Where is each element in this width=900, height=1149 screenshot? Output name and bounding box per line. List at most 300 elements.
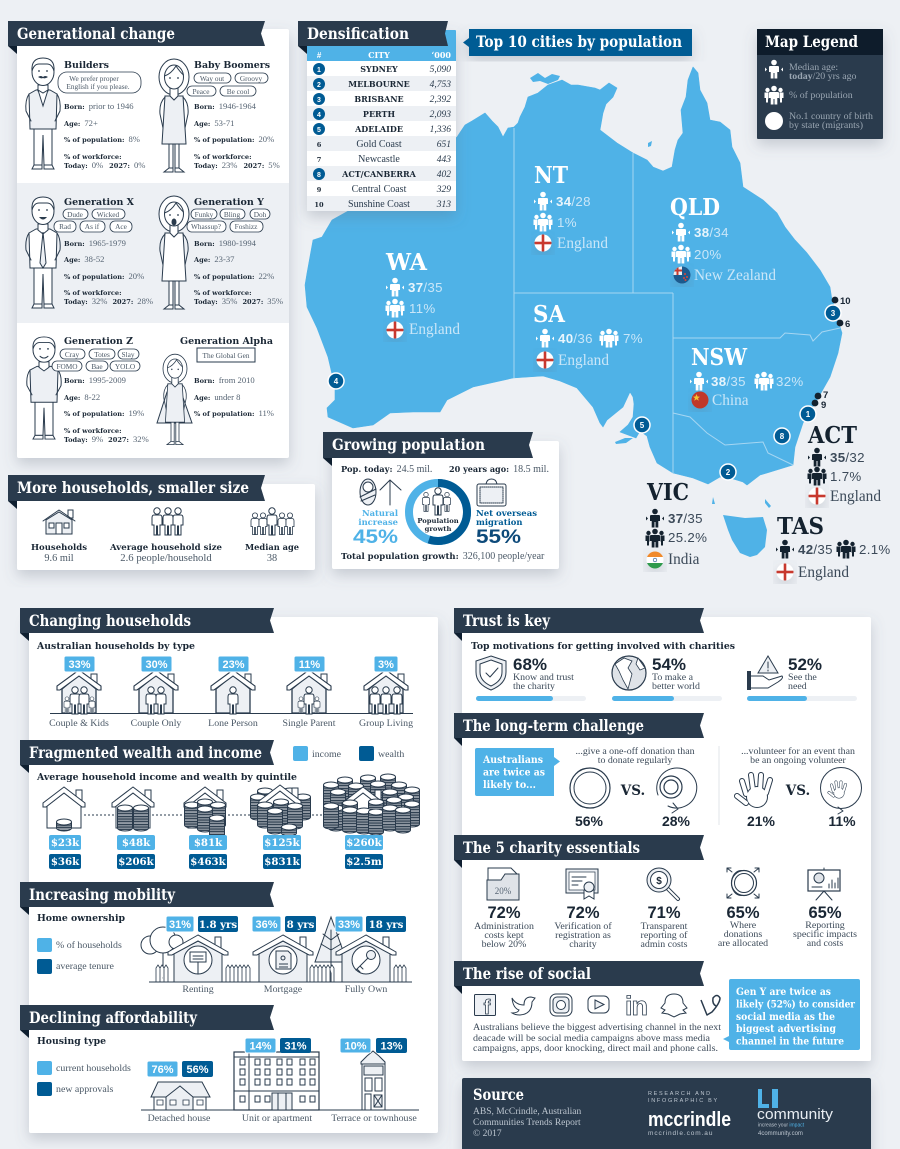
text: generation z: Slay: [122, 350, 135, 359]
text: generation y: [187, 197, 283, 308]
essential: where donations allocated: 65%: [726, 904, 760, 922]
household: single parent: 11%: [299, 659, 320, 671]
table rows: 7: [317, 156, 322, 164]
city marker: 1 Sydney: 1: [806, 410, 811, 419]
city marker: 10 Sunshine Coast: [832, 296, 851, 307]
state label: NSW: 32%: [776, 374, 804, 389]
callout: australians twice as likely: likely to...: [483, 779, 536, 791]
text: generation alpha: The Global Gen: [202, 351, 250, 360]
essential: verification: registration as: [555, 930, 611, 941]
subheading: top motivations: Top motivations for getting involved with charities: [471, 641, 735, 652]
text: generation x: % of workforce:: [64, 289, 122, 297]
stat: households: Households: [31, 542, 87, 552]
heading: declining affordability: Declining affordability: [29, 1008, 198, 1027]
figure: generation x: [26, 197, 60, 308]
house: fully own: [335, 916, 406, 995]
motivation: better world: [612, 655, 722, 701]
text: generation y: Generation Y: [194, 197, 264, 208]
comparison: donations: 56%: [575, 813, 604, 829]
state label: TAS: TAS: [777, 513, 824, 540]
icon: house: [43, 510, 75, 534]
heading: the 5 charity essentials: [454, 835, 704, 868]
heading: more households: [8, 475, 265, 509]
text: generation x: Today: 32% 2027: 28%: [64, 291, 153, 308]
table rows: 6: [317, 141, 322, 149]
state label: SA: 40/36: [558, 331, 593, 346]
state label: ACT: [807, 422, 881, 505]
text: social media paragraph: deacade will be social media campaigns above mass media: [473, 1033, 711, 1044]
text: builders: English if you please.: [66, 82, 130, 91]
logo: mccrindle: mccrindle: [648, 1109, 731, 1131]
quintile 1: $36k: [51, 856, 80, 868]
city marker: 8 Canberra: 8: [780, 432, 785, 441]
essential: reporting impacts: 65%: [808, 904, 842, 922]
text: generation alpha: Born: from 2010: [194, 370, 255, 387]
text: builders: Born: prior to 1946: [64, 96, 134, 113]
legend: income and wealth: income: [312, 749, 342, 760]
figure: generation alpha: [157, 354, 192, 445]
state label: SA: 7%: [623, 331, 643, 346]
building: terrace: 10%: [344, 1040, 367, 1052]
text: baby boomers: % of workforce:: [194, 153, 252, 161]
text: generation z: Generation Z: [64, 336, 133, 347]
comparison: volunteering: VS.: [785, 783, 810, 799]
building: terrace: [331, 1038, 417, 1124]
text: generation y: Today: 35% 2027: 35%: [194, 291, 283, 308]
table rows: 2,093: [430, 110, 451, 120]
essential: where donations allocated: Where: [730, 920, 757, 931]
table rows: [313, 63, 451, 210]
city marker: 8 Canberra: [774, 428, 790, 444]
table rows: PERTH: [363, 109, 396, 119]
text: builders: % of workforce:: [64, 153, 122, 161]
household: couple and kids: [49, 656, 109, 729]
callout: top 10 cities by population: Top 10 cities by population: [476, 32, 682, 51]
quintile 5: [324, 774, 420, 869]
donut chart: population growth: Population: [417, 517, 459, 525]
figure: generation y: [159, 196, 189, 309]
text: generation x: [54, 197, 153, 308]
state label: SA: [533, 301, 643, 369]
heading: generational change: [8, 21, 265, 54]
quintile 2: $48k: [122, 837, 151, 849]
stat: median age: 38: [267, 553, 277, 564]
text: generation x: Age: 38-52: [63, 249, 104, 266]
text: baby boomers: [187, 60, 280, 172]
state label: WA: WA: [385, 249, 428, 276]
icon: vine: [701, 996, 720, 1015]
text: generation z: Today: 9% 2027: 32%: [64, 429, 149, 446]
natural increase stat: Natural: [362, 508, 398, 518]
logo: 4community: community: [757, 1106, 834, 1123]
table rows: 2: [317, 82, 321, 89]
logo: mccrindle: mccrindle.com.au: [648, 1130, 713, 1137]
essential: transparent reporting: reporting of: [641, 930, 688, 941]
motivation: better world: To make a: [652, 672, 694, 683]
comparison: donations: 28%: [662, 813, 691, 829]
motivation: see the need: [747, 655, 857, 701]
legend: income and wealth: [293, 746, 404, 761]
icon: suitcase: [477, 479, 506, 506]
city marker: 3 Brisbane: 3: [831, 309, 836, 318]
state label: VIC: 25.2%: [668, 530, 707, 545]
table rows: 402: [437, 170, 451, 180]
flag: New Zealand: [673, 266, 690, 284]
housing type legend: Housing type: [37, 1036, 106, 1047]
icon: snapchat: [661, 994, 687, 1017]
house: fully own: 33%: [338, 919, 360, 931]
social icons: [474, 991, 720, 1021]
city marker: 9 Central Coast: [812, 400, 826, 411]
text: generation y: Bling: [224, 210, 240, 219]
household: couple only: 30%: [145, 659, 168, 671]
table rows: 2,392: [430, 95, 451, 105]
state label: NT: 1%: [557, 215, 577, 230]
motivation: know and trust: 68%: [513, 655, 547, 674]
text: generation y: Age: 23-37: [193, 249, 235, 266]
subheading: quintile: Average household income and wealth by quintile: [36, 772, 297, 783]
motivation: see the need: See the: [788, 672, 817, 683]
city marker: 2 Melbourne: 2: [726, 468, 731, 477]
city marker: 6 Gold Coast: 6: [845, 319, 850, 330]
house: renting: 31%: [169, 919, 191, 931]
table rows: SYDNEY: [360, 64, 398, 74]
heading: trust is key: Trust is key: [463, 611, 551, 630]
figure: builders: [26, 58, 60, 169]
text: source: [473, 1085, 581, 1139]
logo: mccrindle: RESEARCH AND: [648, 1091, 712, 1097]
state label: QLD: 38/34: [694, 225, 729, 240]
legend: median age: today/20 yrs ago: [789, 71, 857, 82]
panel: more households, smaller size: [8, 475, 315, 570]
city marker: 3 Brisbane: [825, 305, 841, 321]
city marker: 4 Perth: 4: [334, 377, 339, 386]
text: generation x: Rad: [59, 222, 71, 231]
table rows: 1: [317, 67, 321, 74]
essential: reporting impacts: and costs: [807, 938, 843, 949]
table header: #: [317, 51, 322, 60]
figure: baby boomers: [159, 59, 189, 172]
net overseas migration stat: [476, 508, 537, 548]
text: builders: [58, 60, 145, 172]
table header: [317, 50, 451, 60]
mainland: [305, 67, 842, 485]
motivation: better world: 54%: [652, 655, 686, 674]
household: single parent: Single Parent: [283, 718, 336, 729]
comparison: donations: ...give a one-off donation than: [575, 746, 695, 757]
house: detached: 76%: [151, 1064, 174, 1076]
home ownership legend: Home ownership: [37, 913, 125, 924]
motivation: see the need: need: [788, 681, 807, 692]
natural increase stat: [353, 508, 398, 548]
text: baby boomers: % of population: 20%: [194, 129, 274, 146]
donut chart: population growth: growth: [425, 525, 451, 533]
essential: verification: Verification of: [554, 921, 612, 932]
essential: reporting impacts: [793, 868, 857, 949]
text: source: Communities Trends Report: [473, 1118, 581, 1128]
text: baby boomers: Peace: [192, 87, 210, 96]
state label: NSW: [690, 344, 804, 409]
callout: gen y: social media as the: [736, 1011, 835, 1023]
state label: ACT: ACT: [807, 422, 857, 449]
stat: average household size: 2.6 people/household: [120, 552, 212, 564]
city marker: 5 Adelaide: 5: [640, 421, 645, 430]
text: generation y: Funky: [195, 210, 214, 219]
stat: average household size: Average household size: [109, 542, 222, 552]
text: source: © 2017: [473, 1128, 502, 1139]
city marker: 7 Newcastle: [815, 390, 828, 401]
heading: densification: [298, 21, 448, 54]
table rows: 443: [437, 155, 451, 165]
text: generation x: Wicked: [97, 210, 120, 219]
building: apartment: 14%: [249, 1040, 272, 1052]
quintile 1: $23k: [51, 837, 80, 849]
text: generation z: YOLO: [115, 362, 135, 371]
state label: WA: [385, 249, 460, 339]
state label: QLD: New Zealand: [694, 267, 776, 284]
natural increase stat: 45%: [353, 527, 398, 548]
essential: where donations allocated: donations: [724, 929, 762, 940]
ground line: [50, 712, 413, 714]
state label: SA: SA: [533, 301, 566, 328]
quintile 2: $206k: [118, 856, 155, 868]
text: social media paragraph: Australians believe the biggest advertising channel in the next: [473, 1022, 721, 1033]
state label: NSW: 38/35: [711, 374, 746, 389]
text: builders: We prefer proper: [69, 74, 119, 83]
quintile 4: $125k: [264, 837, 301, 849]
text: social media paragraph: campaigns, apps, door knocking, direct mail and phone calls.: [473, 1043, 718, 1054]
essential: reporting impacts: specific impacts: [793, 929, 857, 940]
essential: reporting impacts: Reporting: [805, 920, 845, 931]
state borders: [514, 128, 840, 473]
table rows: 313: [436, 200, 451, 210]
panel: growing population: [323, 432, 559, 569]
text: baby boomers: Age: 53-71: [193, 113, 234, 130]
heading: fragmented wealth and income: [20, 740, 274, 773]
table rows: 10: [314, 201, 324, 209]
household: lone person: [208, 656, 258, 729]
essential: verification: 72%: [566, 904, 600, 922]
text: baby boomers: Be cool: [227, 87, 249, 96]
stat: median age: [245, 542, 299, 564]
text: generation z: [52, 336, 149, 446]
building: apartment: [234, 1038, 319, 1124]
callout: gen y: Gen Y are twice as: [736, 986, 831, 998]
text: generation y: Whassup?: [191, 222, 221, 231]
city marker: 6 Gold Coast: [837, 319, 850, 330]
panel: right lower card: [454, 608, 871, 1061]
state label: ACT: 35/32: [830, 450, 865, 465]
motivation: better world: better world: [652, 681, 700, 692]
state label: VIC: 37/35: [668, 511, 703, 526]
text: generation x: As if: [85, 222, 100, 231]
table rows: MELBOURNE: [348, 79, 410, 89]
panel: source: [462, 1078, 871, 1149]
ground line: [149, 981, 412, 983]
state label: TAS: 42/35: [798, 542, 833, 557]
essential: verification: [554, 869, 612, 950]
essential: administration costs: Administration: [474, 921, 534, 932]
heading: changing households: Changing households: [29, 611, 191, 630]
essential: transparent reporting: 71%: [647, 904, 681, 922]
total growth: Total population growth: 326,100 people/year: [341, 546, 545, 563]
logo: 4community: 4community.com: [758, 1131, 803, 1137]
heading: changing households: [20, 608, 274, 641]
callout: australians twice as likely: [475, 748, 560, 796]
essential: administration costs: costs kept: [484, 930, 524, 941]
text: generation z: Born: 1995-2009: [64, 370, 126, 387]
population today and 20 years ago: Pop. today: 24.5 mil.: [341, 459, 432, 476]
callout: gen y: biggest advertising: [736, 1023, 836, 1035]
text: generation y: % of population: 22%: [194, 266, 274, 283]
population today and 20 years ago: [341, 459, 549, 476]
table rows: 4: [317, 112, 321, 119]
state label: SA: England: [558, 352, 609, 369]
state label: ACT: 1.7%: [830, 469, 862, 484]
heading: fragmented wealth and income: Fragmented wealth and income: [29, 743, 262, 762]
house: mortgage: 36%: [255, 919, 278, 931]
text: generation x: Generation X: [64, 197, 135, 208]
subheading: households by type: Australian households by type: [36, 641, 195, 652]
home ownership legend: [37, 913, 125, 974]
callout: gen y: likely (52%) to consider: [736, 998, 856, 1010]
text: generation alpha: Generation Alpha: [180, 336, 273, 347]
stat: households: [31, 542, 87, 564]
quintile 3: [184, 787, 227, 869]
house: detached: [147, 1061, 213, 1124]
text: baby boomers: Today: 23% 2027: 5%: [194, 155, 280, 172]
table rows: 329: [436, 185, 451, 195]
essential: where donations allocated: are allocated: [718, 938, 768, 949]
net overseas migration stat: migration: [476, 517, 522, 527]
household: lone person: Lone Person: [208, 718, 258, 729]
divider: [718, 746, 720, 825]
table rows: 4,753: [430, 80, 451, 90]
callout: gen y: channel in the future: [736, 1036, 844, 1048]
comparison: volunteering: 21%: [747, 813, 776, 829]
text: baby boomers: Baby Boomers: [194, 60, 270, 71]
state label: TAS: 2.1%: [859, 542, 891, 557]
household: single parent: [283, 656, 336, 729]
essential: administration costs: [474, 868, 534, 950]
population today and 20 years ago: 20 years ago: 18.5 mil.: [449, 459, 549, 476]
natural increase stat: increase: [358, 517, 398, 527]
table rows: ACT/CANBERRA: [341, 169, 417, 179]
ground line: [141, 1109, 419, 1111]
essential: verification: charity: [569, 939, 597, 950]
house: detached: Detached house: [148, 1113, 211, 1124]
table rows: 8: [317, 172, 321, 179]
comparison: donations: to donate regularly: [598, 755, 672, 766]
state label: NSW: NSW: [691, 344, 748, 371]
house: renting: Renting: [182, 984, 214, 995]
essential: transparent reporting: $: [656, 876, 662, 887]
table rows: 5: [317, 127, 321, 134]
state label: NT: England: [557, 235, 608, 252]
household: couple only: Couple Only: [131, 718, 181, 729]
essential: transparent reporting: admin costs: [641, 939, 688, 950]
motivation: know and trust: Know and trust: [513, 672, 574, 683]
state label: QLD: QLD: [670, 194, 720, 221]
flag: India: [646, 551, 664, 569]
table rows: 9: [317, 186, 322, 194]
essential: administration costs: below 20%: [482, 939, 526, 950]
callout: australians twice as likely: Australians: [482, 754, 543, 766]
panel: map legend: [757, 29, 883, 139]
heading: the rise of social: [454, 961, 704, 994]
house: renting: [166, 916, 238, 995]
state label: NSW: China: [712, 392, 749, 409]
table rows: 1,336: [430, 125, 451, 135]
table rows: 651: [437, 140, 451, 150]
household: group living: Group Living: [359, 718, 413, 729]
table rows: Newcastle: [358, 154, 400, 165]
quintile 3: $463k: [190, 856, 227, 868]
housing type legend: [37, 1036, 131, 1096]
motivation: know and trust: the charity: [513, 681, 555, 692]
essential: administration costs: 72%: [487, 904, 521, 922]
table rows: Central Coast: [352, 184, 407, 195]
state label: ACT: England: [830, 488, 881, 505]
building: apartment: Unit or apartment: [242, 1113, 312, 1124]
house: mortgage: 8 yrs: [287, 919, 315, 931]
table rows: ADELAIDE: [354, 124, 403, 134]
text: builders: Today: 0% 2027: 0%: [64, 155, 145, 172]
icon: baby: [360, 479, 376, 505]
logo: mccrindle: [648, 1091, 731, 1137]
text: generation z: FOMO: [56, 362, 78, 371]
text: generation z: % of population: 19%: [64, 403, 144, 420]
text: source: Source: [473, 1085, 524, 1104]
text: generation y: Born: 1980-1994: [194, 233, 257, 250]
house: mortgage: Mortgage: [264, 984, 303, 995]
heading: generational change: Generational change: [17, 24, 175, 43]
text: generation alpha: % of population: 11%: [194, 403, 274, 420]
logo: 4community: [757, 1089, 834, 1137]
household: couple and kids: 33%: [68, 659, 91, 671]
text: baby boomers: Way out: [200, 74, 224, 83]
state label: WA: 11%: [409, 301, 436, 316]
table rows: 5,090: [430, 65, 451, 75]
text: generation z: Bae: [91, 362, 103, 371]
household: couple only: [131, 656, 181, 729]
building: apartment: 31%: [284, 1040, 307, 1052]
table rows: BRISBANE: [354, 94, 404, 104]
quintile 4: $831k: [264, 856, 301, 868]
city marker: 4 Perth: [328, 373, 344, 389]
text: generation alpha: [180, 336, 274, 420]
heading: the rise of social: The rise of social: [463, 964, 591, 983]
house: renting: 1.8 yrs: [199, 919, 237, 931]
table rows: Sunshine Coast: [348, 199, 410, 210]
icon: youtube: [588, 996, 609, 1013]
state label: QLD: 20%: [694, 247, 722, 262]
city marker: 9 Central Coast: 9: [821, 400, 826, 411]
heading: the long-term challenge: [454, 713, 704, 746]
stat: households: 9.6 mil: [44, 553, 74, 564]
home ownership legend: % of households: [56, 940, 122, 951]
housing type legend: new approvals: [56, 1084, 113, 1095]
callout: gen y: [723, 979, 860, 1050]
house: detached: 56%: [186, 1064, 209, 1076]
icon: median age people: [251, 508, 294, 535]
text: source: ABS, McCrindle, Australian: [473, 1107, 581, 1117]
essential: transparent reporting: [641, 868, 688, 950]
table rows: 3: [317, 97, 321, 104]
text: generation z: Totes: [94, 350, 110, 359]
household: couple and kids: Couple & Kids: [49, 718, 109, 729]
donut chart: population growth: [409, 483, 467, 541]
